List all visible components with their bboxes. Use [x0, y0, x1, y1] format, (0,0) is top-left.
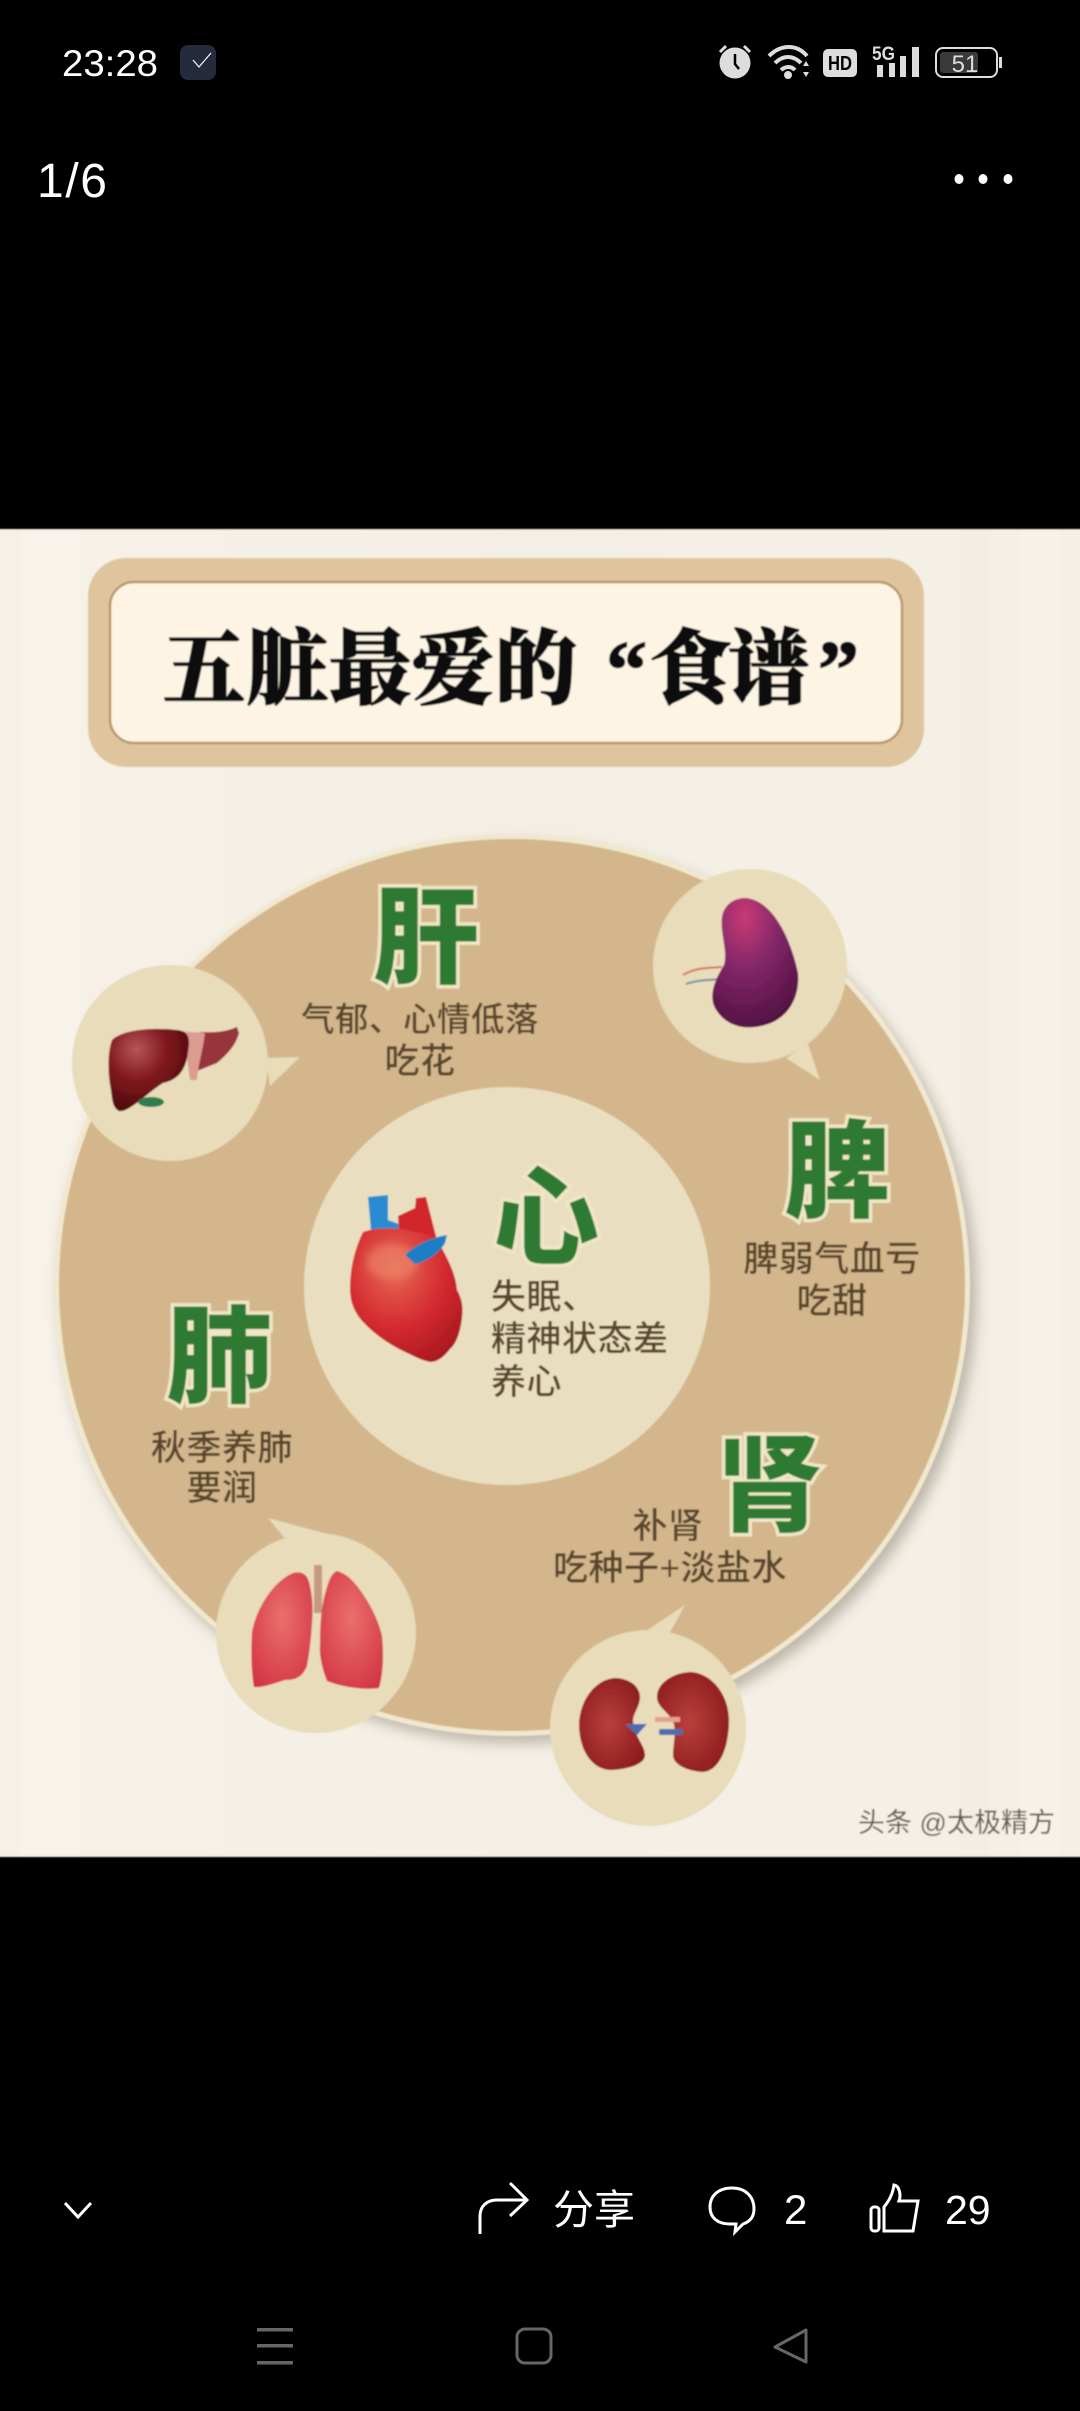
organ name: lung: 肺: [166, 1299, 272, 1417]
icon: HD badge: [823, 49, 857, 77]
icon: liver: [108, 1027, 239, 1111]
icon: menu: [257, 2328, 293, 2364]
comment count: 2: [784, 2186, 807, 2233]
text: liver advice: 气郁、心情低落: [301, 1002, 539, 1039]
text: spleen advice: 吃甜: [796, 1282, 868, 1321]
organ name: heart: 心: [493, 1161, 599, 1279]
icon: kidneys: [579, 1672, 729, 1772]
callout: lungs: [216, 1518, 416, 1733]
icon: battery 51: 51: [952, 51, 978, 78]
icon: thumbs up: [871, 2185, 918, 2231]
icon: lungs: [251, 1565, 383, 1689]
icon: battery 51: [936, 48, 1002, 78]
text: liver advice: [301, 1002, 539, 1081]
organ name: kidney: 肾: [717, 1428, 823, 1546]
text: lung advice: 秋季养肺: [151, 1429, 293, 1468]
text: liver advice: 吃花: [384, 1042, 456, 1081]
text: kidney advice: 补肾: [632, 1507, 704, 1546]
icon: alarm clock: [720, 46, 750, 78]
icon: notification app: [180, 45, 216, 80]
callout: spleen: [653, 869, 847, 1080]
center circle: [304, 1087, 710, 1485]
text: kidney advice: [553, 1507, 787, 1588]
text: heart advice: 养心: [491, 1363, 562, 1402]
text: heart advice: [491, 1278, 669, 1402]
text: heart advice: 精神状态差: [491, 1320, 669, 1359]
icon: spleen: [683, 898, 798, 1027]
like count: 29: [945, 2187, 991, 2233]
page counter: 1/6: [37, 155, 107, 208]
text: heart advice: 失眠、: [491, 1278, 598, 1317]
big tan circle: [54, 834, 976, 1743]
organ name: liver: 肝: [373, 880, 479, 998]
watermark: 头条 @太极精方: [858, 1808, 1055, 1838]
text: lung advice: [151, 1429, 293, 1508]
title plaque: [88, 558, 924, 767]
text: spleen advice: [743, 1240, 921, 1321]
icon: share arrow: [480, 2183, 527, 2234]
icon: wifi: [769, 47, 809, 77]
icon: heart: [350, 1195, 462, 1362]
paper background: [0, 529, 1080, 1857]
text: spleen advice: 脾弱气血亏: [743, 1240, 921, 1279]
clock time: 23:28: [62, 43, 158, 84]
icon: 5G signal: [872, 44, 919, 77]
icon: HD badge: HD: [828, 53, 852, 75]
icon: comment bubble: [710, 2188, 754, 2232]
share label: 分享: [553, 2187, 635, 2233]
callout: kidneys: [550, 1605, 746, 1826]
icon: collapse chevron: [65, 2203, 91, 2217]
panel: infographic image: [0, 529, 1080, 1857]
icon: home square: [517, 2329, 551, 2363]
icon: more dots: [954, 174, 1012, 184]
organ name: spleen: 脾: [784, 1114, 890, 1232]
callout: liver: [72, 965, 300, 1161]
status bar: [62, 43, 1002, 84]
navigation bar: [257, 2328, 806, 2364]
icon: 5G signal: 5G: [872, 44, 895, 65]
icon: back triangle: [775, 2330, 806, 2362]
title: 五脏最爱的“食谱”: [163, 624, 859, 715]
text: kidney advice: 吃种子+淡盐水: [553, 1549, 787, 1588]
action bar: [65, 2183, 991, 2234]
text: lung advice: 要润: [186, 1469, 258, 1508]
